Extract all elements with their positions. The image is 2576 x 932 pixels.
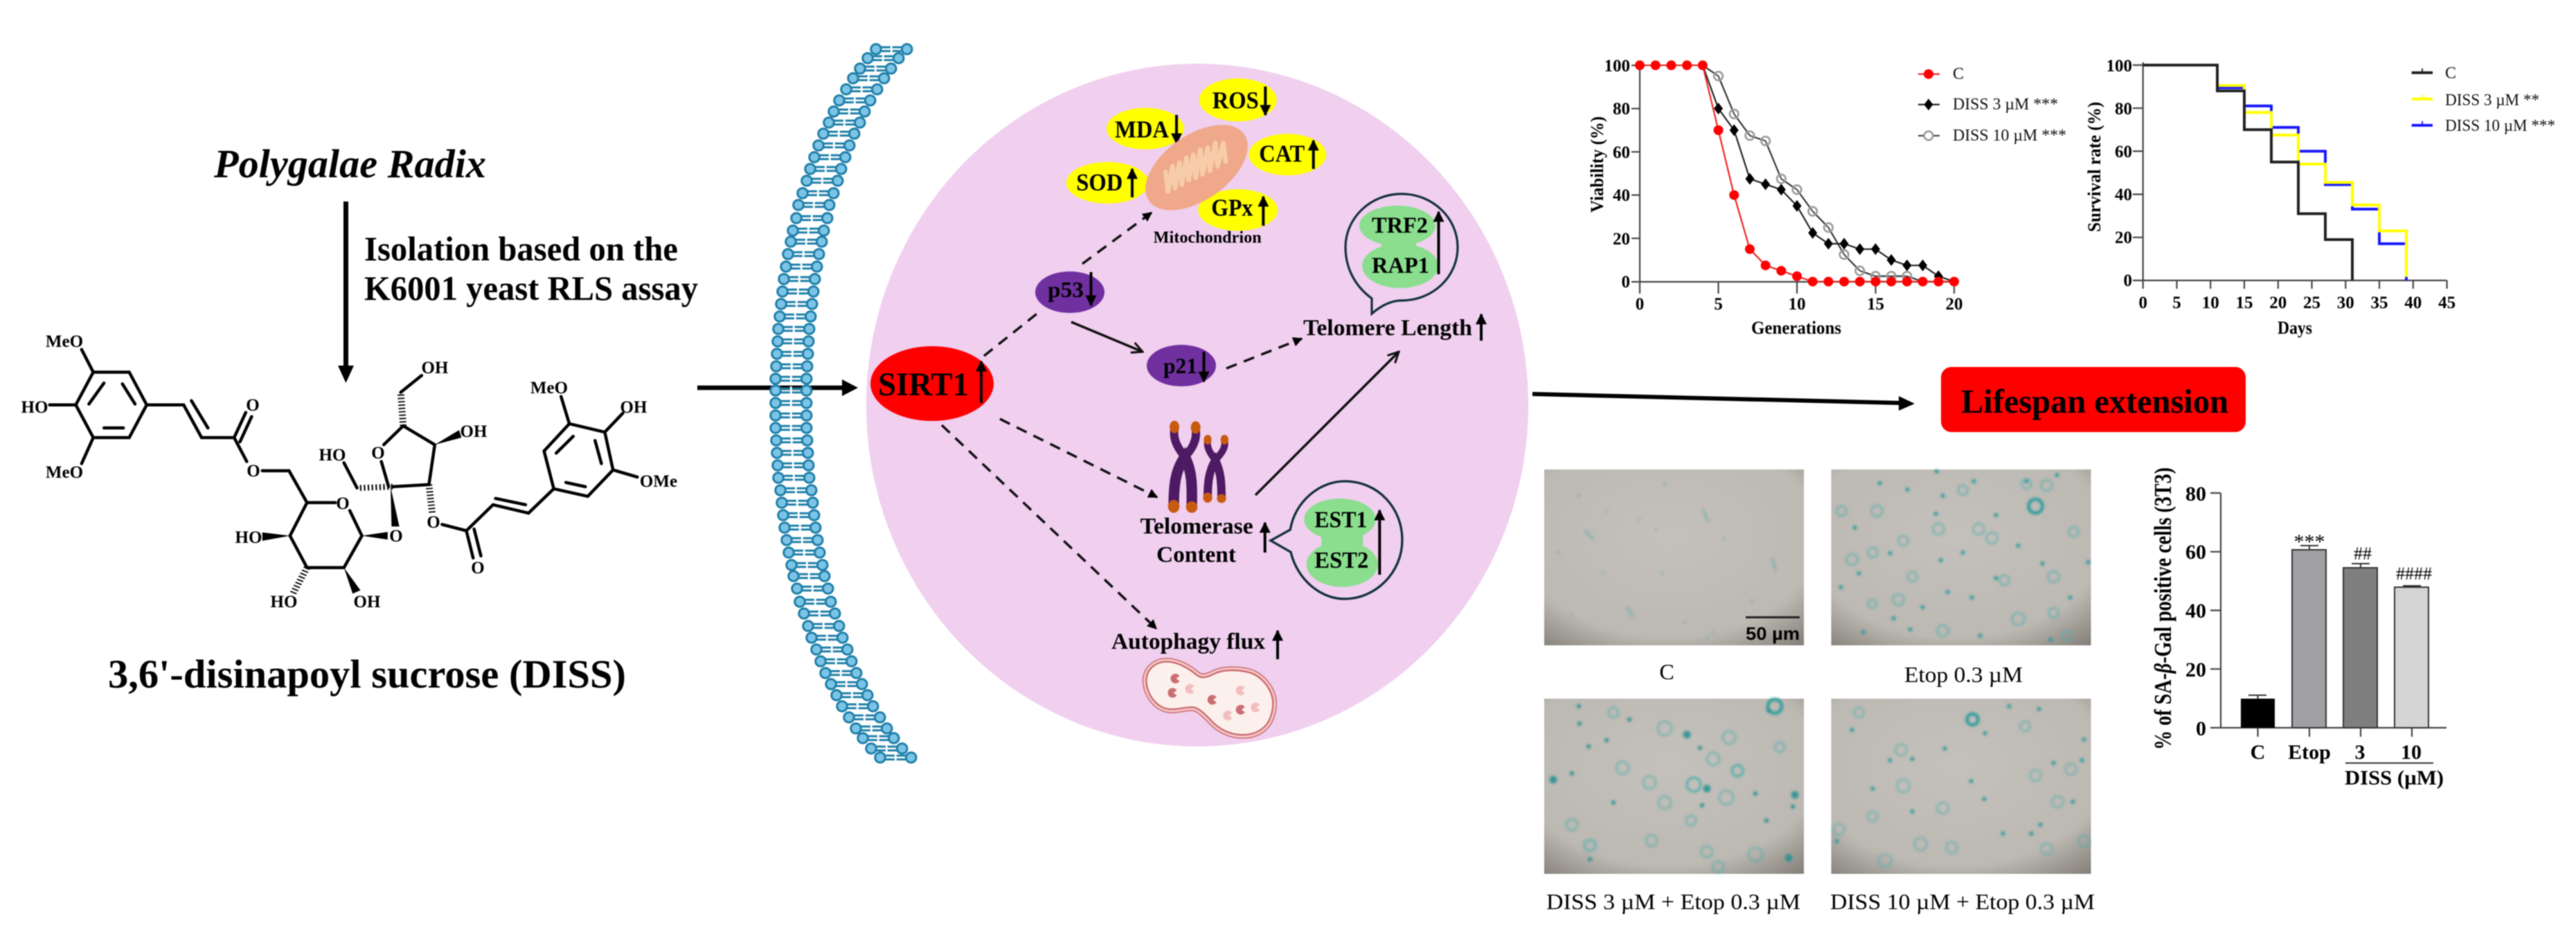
micrograph: control [1544, 469, 1804, 645]
chemical structure of DISS: O [336, 494, 350, 513]
bar: DISS 3 µM [2343, 544, 2377, 728]
p21 node [1147, 345, 1216, 386]
viability axes: 15 [1867, 295, 1884, 314]
micrograph caption: C: C [1659, 659, 1674, 684]
series: control [1635, 60, 1959, 287]
viability axes: Generations [1751, 318, 1841, 338]
y axis title: % of SA-β-Gal positive cells (3T3) [2149, 467, 2176, 750]
viability axes: 80 [1613, 100, 1630, 118]
chemical structure of DISS: O [471, 559, 485, 577]
survival axes: 10 [2202, 294, 2219, 312]
survival axes: 100 [2107, 57, 2132, 75]
GPx marker: GPx [1211, 195, 1253, 222]
p21 node: p21 [1163, 353, 1197, 378]
bar chart x labels: DISS (µM) [2345, 767, 2444, 789]
survival axes [2084, 57, 2456, 338]
micrograph: DISS 3 µM + Etop [1544, 699, 1804, 874]
viability legend: DISS 10 µM *** [1953, 127, 2066, 145]
viability legend [1918, 65, 2066, 145]
speech bubble: TRF2 and RAP1 [1345, 194, 1458, 314]
survival axes: 15 [2235, 294, 2253, 312]
chemical structure of DISS: O [247, 462, 260, 481]
survival legend: DISS 3 µM ** [2445, 91, 2539, 109]
bar chart y tick labels: 20 [2185, 658, 2206, 681]
speech bubble: TRF2 and RAP1: TRF2 [1372, 213, 1428, 238]
bar chart: SA-β-Gal positive cells [2149, 467, 2447, 789]
isolation description text [364, 229, 698, 307]
bar: DISS 10 µM [2395, 564, 2432, 728]
viability axes: 40 [1613, 186, 1630, 205]
MDA marker [1107, 108, 1184, 150]
chemical structure of DISS: OH [354, 593, 381, 611]
bar chart y tick labels: 60 [2185, 541, 2206, 564]
telomere length label: Telomere Length [1303, 316, 1472, 341]
arrow: mechanism to lifespan extension [1532, 394, 1915, 411]
survival axes: 45 [2438, 294, 2456, 312]
survival legend: DISS 10 µM *** [2445, 117, 2555, 135]
micrograph caption: Etop: Etop 0.3 µM [1904, 662, 2023, 687]
bar: Etop [2292, 530, 2326, 728]
bar chart x labels [2251, 741, 2444, 789]
bar: DISS 10 µM: #### [2396, 564, 2432, 584]
telomerase content label: Content [1156, 543, 1236, 568]
bar chart x labels: 3 [2354, 741, 2365, 764]
viability axes: 5 [1714, 295, 1723, 314]
chemical structure of DISS: O [389, 527, 403, 546]
bar: Etop: *** [2293, 530, 2325, 553]
viability axes: 10 [1788, 295, 1806, 314]
source heading: Polygalae Radix: Polygalae Radix [213, 141, 486, 186]
SOD marker: SOD [1076, 169, 1122, 196]
survival axes: 0 [2138, 294, 2147, 312]
GPx marker [1198, 189, 1278, 231]
icon: mitochondrion [1130, 107, 1263, 228]
viability legend: C [1953, 65, 1964, 83]
viability axes: Viability (%) [1587, 116, 1607, 213]
chemical structure of DISS: HO [319, 446, 346, 465]
bar chart y tick labels: 0 [2196, 717, 2206, 740]
series: DISS 10 µM [1703, 65, 1954, 282]
survival axes: 0 [2123, 271, 2132, 290]
survival axes: 20 [2269, 294, 2287, 312]
chemical structure of DISS: HO [21, 398, 48, 417]
p53 node [1035, 271, 1104, 313]
survival axes: 30 [2337, 294, 2354, 312]
survival legend [2412, 64, 2555, 135]
step chart: survival rate by days [2084, 57, 2555, 338]
speech bubble: EST1 and EST2 [1271, 481, 1402, 599]
oxidative stress markers and mitochondrion [1066, 78, 1326, 247]
telomerase content label [1141, 514, 1265, 568]
survival axes: 40 [2115, 186, 2132, 204]
survival axes: Survival rate (%) [2084, 102, 2104, 232]
mitochondrion label: Mitochondrion [1154, 229, 1262, 247]
arrow: isolation step [338, 201, 354, 383]
series: DISS 3 µM [2217, 86, 2406, 277]
ROS marker: ROS [1213, 87, 1259, 114]
scale bar: 50 µm [1746, 623, 1800, 644]
MDA marker: MDA [1115, 116, 1170, 143]
chemical structure of DISS: O [371, 444, 385, 463]
chemical structure of DISS: MeO [530, 379, 568, 397]
CAT marker [1249, 134, 1326, 175]
bar chart y tick labels: 80 [2185, 483, 2206, 505]
chemical structure of DISS [21, 332, 677, 611]
viability axes: 100 [1604, 57, 1630, 75]
micrograph caption: DISS 3 µM: DISS 3 µM + Etop 0.3 µM [1546, 889, 1800, 914]
chemical structure of DISS: OH [460, 422, 488, 441]
survival axes: 60 [2115, 143, 2132, 161]
telomerase content label: Telomerase [1141, 514, 1253, 539]
chemical structure of DISS: MeO [46, 463, 83, 482]
bar chart x labels: C [2251, 741, 2265, 764]
series: DISS 10 µM [2217, 88, 2406, 280]
survival axes: 40 [2404, 294, 2422, 312]
chemical structure of DISS: OH [620, 398, 647, 417]
callout: lifespan extension [1941, 367, 2246, 432]
chemical structure of DISS: OH [422, 359, 449, 377]
chemical structure of DISS: O [246, 396, 260, 415]
survival axes: 80 [2115, 100, 2132, 118]
bar chart axes [2210, 493, 2447, 737]
cell membrane lipid bilayer [771, 44, 916, 762]
viability axes: 20 [1613, 230, 1630, 249]
viability legend: DISS 3 µM *** [1953, 96, 2058, 114]
viability axes: 0 [1622, 273, 1630, 292]
autophagy flux label: Autophagy flux [1111, 629, 1266, 654]
bar: control [2241, 695, 2275, 728]
isolation description text: K6001 yeast RLS assay [364, 269, 698, 307]
icon: autophagosome [1146, 662, 1273, 735]
CAT marker: CAT [1259, 140, 1305, 167]
viability axes [1587, 57, 1962, 338]
survival axes: 5 [2172, 294, 2181, 312]
bar chart x labels: 10 [2401, 741, 2422, 764]
survival axes: Days [2278, 318, 2312, 338]
line chart: yeast viability by generations [1587, 57, 2066, 338]
survival legend: C [2445, 64, 2456, 82]
speech bubble: EST1 and EST2: EST1 [1314, 508, 1367, 533]
bar chart x labels: Etop [2288, 741, 2331, 764]
bar: DISS 3 µM: ## [2354, 544, 2372, 564]
survival axes: 20 [2115, 228, 2132, 247]
chemical structure of DISS: O [427, 513, 440, 532]
micrograph caption: DISS 10 µM: DISS 10 µM + Etop 0.3 µM [1830, 889, 2095, 914]
viability axes: 60 [1613, 143, 1630, 162]
SOD marker [1066, 162, 1149, 204]
survival axes: 35 [2371, 294, 2388, 312]
speech bubble: EST1 and EST2: EST2 [1314, 548, 1368, 573]
bar chart y tick labels [2185, 483, 2206, 740]
series: control [2143, 65, 2352, 280]
chemical structure of DISS: OMe [640, 472, 677, 491]
p53 node: p53 [1048, 277, 1084, 302]
speech bubble: TRF2 and RAP1: RAP1 [1372, 253, 1429, 278]
SIRT1 node [870, 346, 994, 421]
compound name: 3,6'-disinapoyl sucrose (DISS) [108, 652, 626, 697]
pathway arrows [942, 213, 1399, 629]
series: DISS 3 µM [1703, 65, 1954, 282]
micrograph: DISS 10 µM + Etop [1831, 699, 2091, 874]
chemical structure of DISS: MeO [46, 332, 83, 351]
viability axes: 0 [1636, 295, 1644, 314]
chemical structure of DISS: HO [271, 593, 297, 611]
micrograph: Etop 0.3 µM [1831, 469, 2091, 645]
callout: lifespan extension: Lifespan extension [1961, 382, 2228, 420]
viability axes: 20 [1946, 295, 1962, 314]
SIRT1 node: SIRT1 [878, 366, 969, 403]
icon: chromosomes [1168, 421, 1228, 513]
isolation description text: Isolation based on the [364, 229, 678, 268]
bar chart y tick labels: 40 [2185, 600, 2206, 622]
panel: cell mechanism circle [866, 64, 1528, 746]
ROS marker [1199, 78, 1277, 121]
arrow: DISS into cell [697, 379, 858, 396]
chemical structure of DISS: HO [235, 528, 262, 547]
survival axes: 25 [2303, 294, 2320, 312]
